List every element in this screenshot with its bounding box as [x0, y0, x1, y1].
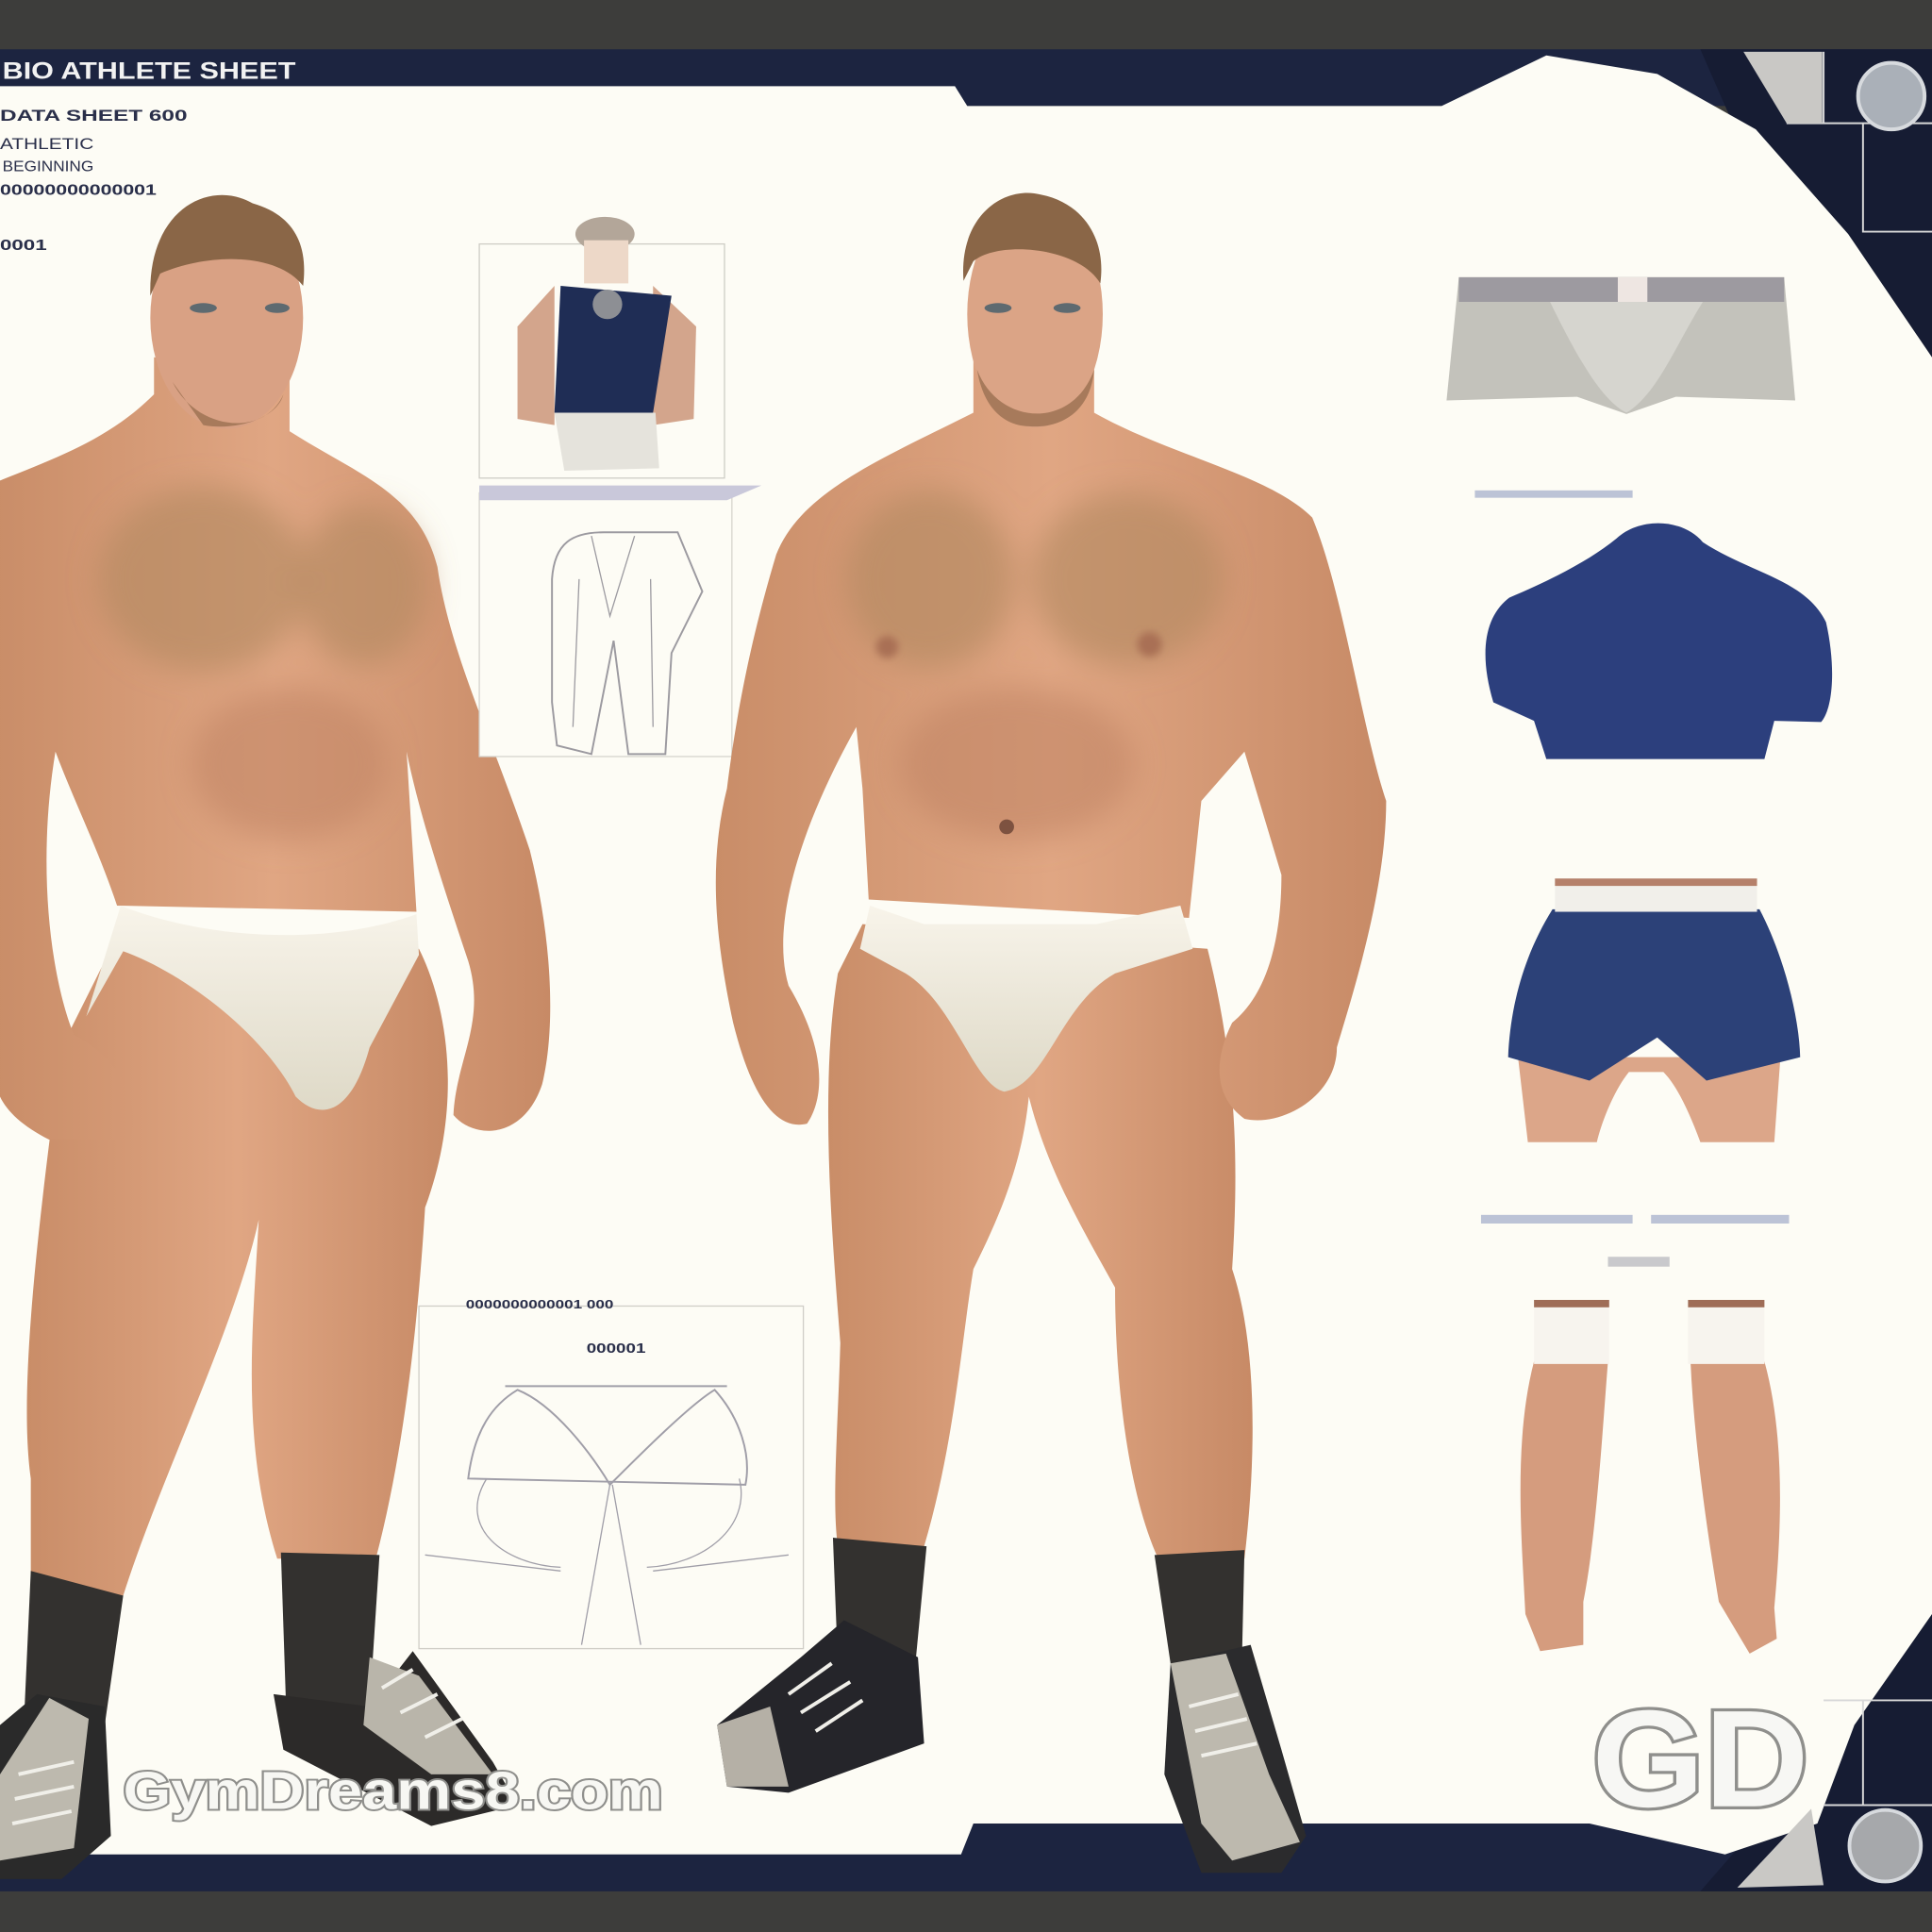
left figure head — [150, 195, 304, 429]
main figure torso and arms — [716, 358, 1386, 1124]
header text block — [0, 59, 295, 254]
sketch panel: lower body diagram: 000001 — [587, 1341, 645, 1357]
left figure legs — [26, 949, 448, 1595]
logo: GD: GD — [1592, 1682, 1808, 1836]
sketch panel: lower body diagram — [419, 1297, 804, 1649]
garment: legs with white leg bands — [1521, 1300, 1780, 1654]
left figure shoes — [0, 1651, 518, 1879]
main figure socks — [833, 1538, 1244, 1675]
main figure shoes — [717, 1621, 1306, 1873]
corner badges — [1738, 52, 1932, 1888]
header text block: DATA SHEET 600 — [0, 107, 188, 125]
sketch panel: back view — [479, 217, 724, 478]
garment: navy torso back view — [1486, 524, 1832, 759]
decorative label strip — [1474, 491, 1633, 498]
decorative label strips — [1481, 1215, 1789, 1267]
sketch panel: pattern lines — [479, 486, 761, 757]
watermark: site name: GymDreams8.com — [124, 1760, 663, 1820]
main figure head — [963, 192, 1103, 427]
main figure — [716, 192, 1386, 1873]
header text block: 00000000000001 — [0, 182, 157, 198]
main figure chest shading — [846, 491, 1224, 841]
left figure garment — [86, 906, 419, 1109]
garment views column — [1446, 277, 1832, 1654]
left figure socks — [25, 1553, 379, 1725]
header text block: BEGINNING — [3, 159, 93, 175]
garment: navy shorts back view — [1508, 878, 1800, 1142]
main figure legs — [828, 924, 1253, 1558]
header text block: 0001 — [0, 238, 47, 254]
main figure garment — [860, 906, 1192, 1091]
left figure torso and arms — [0, 358, 550, 1140]
title: BIO ATHLETE SHEET — [3, 59, 295, 85]
garment: grey front view — [1446, 277, 1795, 414]
left figure chest shading — [98, 487, 427, 841]
diagram caption: 0000000000001 000 — [466, 1297, 613, 1311]
header text block: ATHLETIC — [0, 135, 93, 153]
left figure — [0, 195, 550, 1879]
